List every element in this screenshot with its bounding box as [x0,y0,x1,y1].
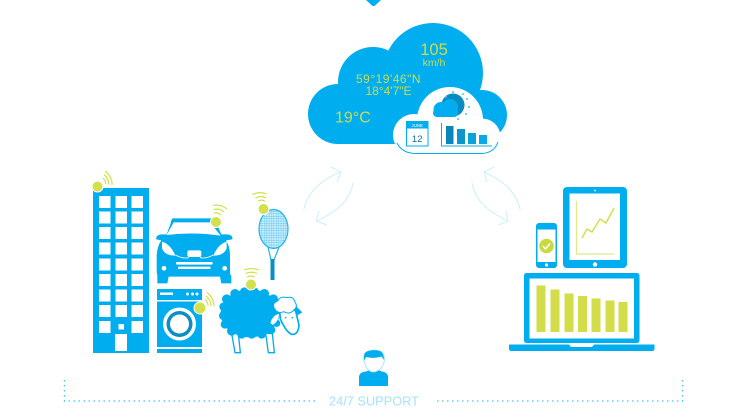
sensor: car [210,205,227,228]
icon: tennis racket [259,210,288,280]
marker: top pointer [366,0,381,6]
coordinates reading [356,72,421,98]
temperature reading: 19°C [335,110,371,126]
icon: support agent [359,350,388,386]
icon: smartphone with check [536,223,557,268]
user devices group [509,187,654,351]
icon: laptop with bar chart [509,273,654,351]
laptop bars [536,286,628,332]
icon: calendar [406,121,428,146]
icon: car [156,218,232,283]
icon: office building [93,188,149,353]
speed reading: km/h [423,57,446,69]
speed reading [420,41,448,69]
coordinates reading: 59°19'46"N [356,72,421,86]
icon: sheep [219,287,302,353]
icon: tablet with line chart [563,187,627,268]
connected things group [92,171,302,353]
support label: 24/7 SUPPORT [329,394,419,408]
icon: calendar: JUNE [411,123,423,128]
arrows: left sync cycle [304,167,353,225]
sensor: sheep [244,268,259,290]
icon: sun and cloud [433,91,470,120]
icon: calendar: 12 [412,134,422,145]
sensor: building [92,171,112,192]
cloud with live data [308,23,507,156]
cloud shape [308,23,507,144]
sensor: racket [252,193,269,214]
speed reading: 105 [420,41,448,59]
small white forecast cloud [393,87,500,156]
icon: washing machine [157,289,202,353]
support bracket line [64,380,682,401]
mini bar chart [442,123,492,146]
sensor: washing machine [194,292,214,314]
coordinates reading: 18°4'7"E [365,84,412,98]
arrows: right sync cycle [472,167,520,225]
